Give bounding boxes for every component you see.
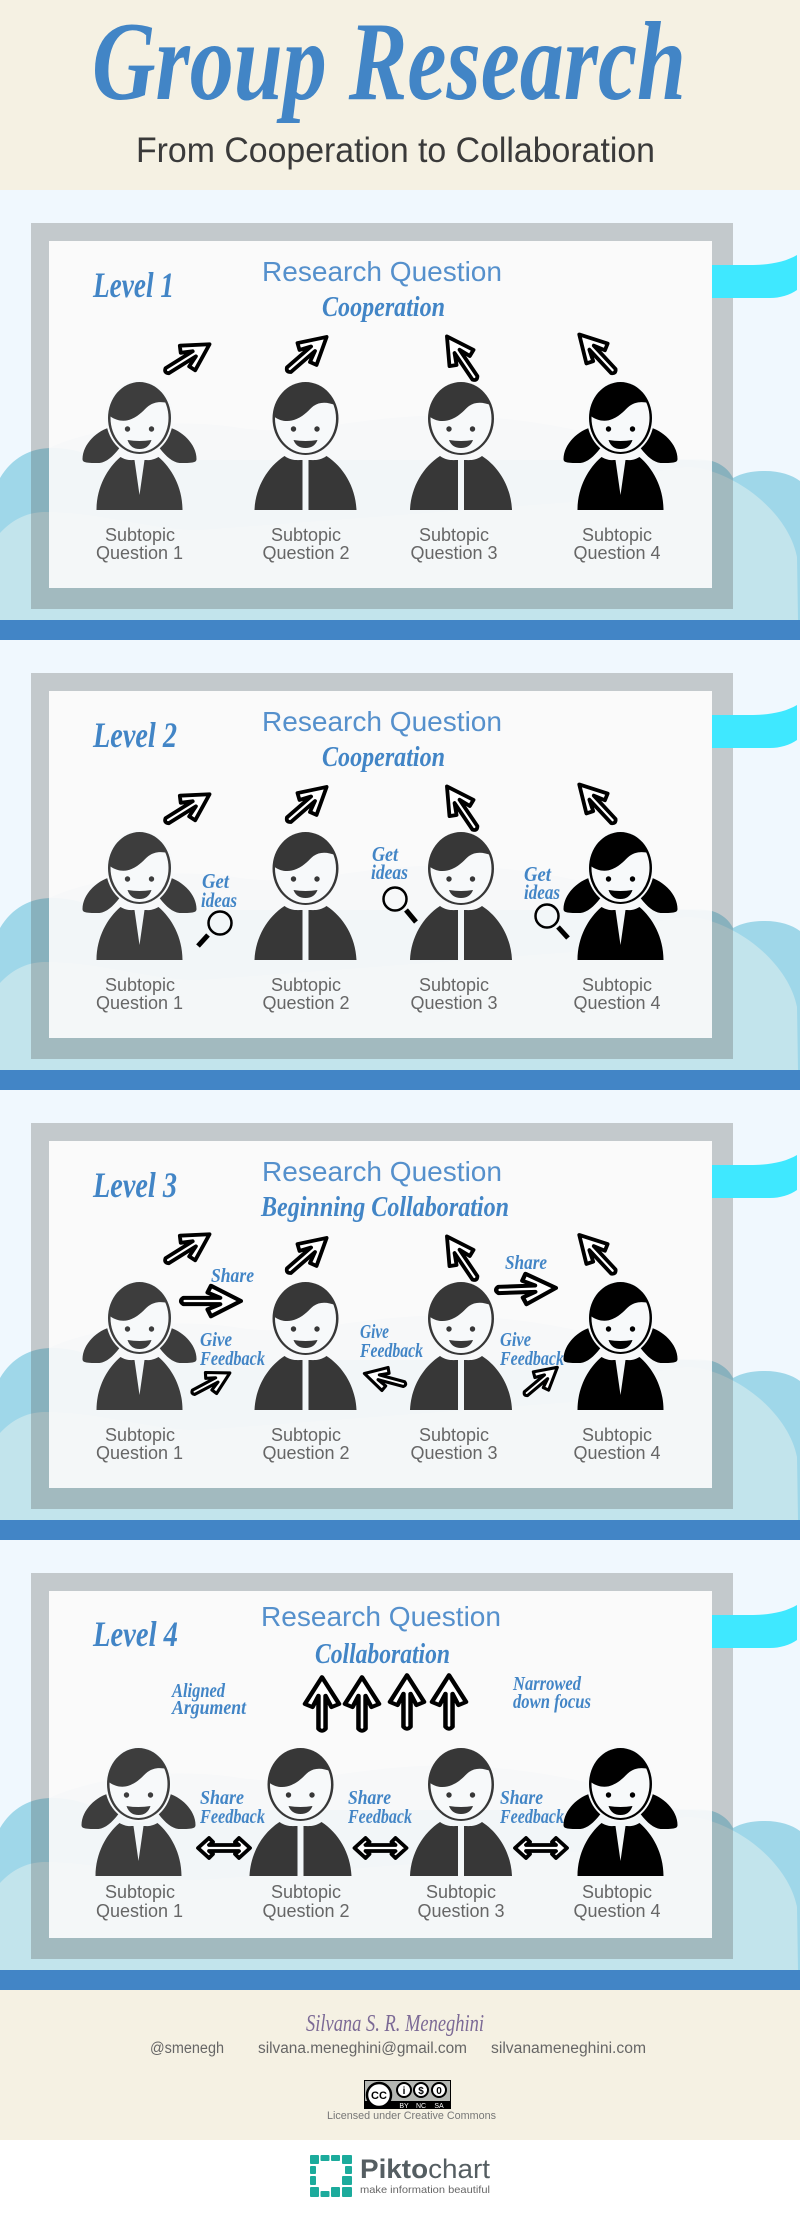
subtopic labels: Subtopic (271, 525, 341, 545)
subtopic labels: Subtopic (271, 1425, 341, 1445)
figure: student 3 (410, 1282, 512, 1410)
share feedback notes: Share (500, 1787, 543, 1809)
peer arrows (181, 1273, 565, 1404)
license text: Licensed under Creative Commons (327, 2110, 496, 2122)
figure: student 4 (564, 1746, 678, 1876)
figure: student 3 (410, 382, 512, 510)
subtopic labels: Subtopic (105, 975, 175, 995)
subtopic labels: Question 2 (262, 1901, 350, 1921)
get ideas notes: Get (202, 869, 230, 893)
creative commons badge: $ (418, 2086, 424, 2097)
get ideas notes: ideas (201, 888, 237, 912)
share and feedback notes: Feedback (499, 1348, 564, 1370)
share and feedback notes (199, 1252, 564, 1370)
subtopic labels: Question 4 (573, 1901, 661, 1921)
header band (0, 0, 800, 190)
research question heading: Research Question (262, 256, 502, 287)
share feedback notes: Feedback (199, 1806, 265, 1828)
subtopic labels: Question 4 (573, 993, 661, 1013)
research question heading: Research Question (261, 1601, 501, 1632)
subtopic labels: Question 1 (96, 543, 183, 563)
research question heading: Research Question (262, 706, 502, 737)
contact details (150, 2040, 646, 2057)
get ideas notes (201, 842, 560, 912)
subtopic labels: Subtopic (419, 1425, 489, 1445)
subtopic labels (96, 525, 661, 563)
subtopic labels: Question 4 (573, 1443, 661, 1463)
creative commons badge: BY (399, 2103, 409, 2110)
section: level 3 (0, 1123, 800, 1540)
subtopic labels: Question 3 (410, 543, 498, 563)
get ideas notes: Get (524, 862, 552, 886)
creative commons badge: NC (416, 2103, 426, 2110)
share and feedback notes: Share (505, 1252, 547, 1274)
subtopic labels: Subtopic (582, 975, 652, 995)
creative commons badge: i (403, 2086, 406, 2097)
subtopic labels: Subtopic (419, 525, 489, 545)
figure: student 1 (82, 1746, 196, 1876)
stage label: Cooperation (322, 742, 445, 773)
footer band (0, 1990, 800, 2140)
level heading: Level 2 (92, 715, 177, 755)
share feedback notes: Share (348, 1787, 391, 1809)
subtopic labels (96, 975, 661, 1013)
piktochart tagline: make information beautiful (360, 2184, 490, 2196)
share feedback notes: Feedback (499, 1806, 564, 1828)
side notes: Argument (170, 1697, 247, 1719)
subtopic labels: Subtopic (419, 975, 489, 995)
piktochart logo mark (310, 2155, 352, 2197)
contact details: silvanameneghini.com (491, 2040, 646, 2057)
get ideas notes: ideas (524, 880, 560, 904)
creative commons badge: SA (434, 2103, 444, 2110)
arrows to research question (158, 775, 625, 838)
share feedback notes: Share (200, 1787, 244, 1809)
subtopic labels: Subtopic (271, 975, 341, 995)
share and feedback notes: Share (211, 1265, 254, 1287)
research question heading: Research Question (262, 1156, 502, 1187)
upward arrows (305, 1675, 466, 1731)
share and feedback notes: Give (200, 1329, 232, 1351)
side notes: down focus (513, 1691, 591, 1713)
piktochart wordmark: Piktochart (360, 2154, 491, 2184)
subtopic labels: Question 2 (262, 1443, 350, 1463)
figure: student 4 (564, 830, 678, 960)
subtopic labels: Question 3 (410, 993, 498, 1013)
stage label: Collaboration (315, 1639, 450, 1670)
contact details: @smenegh (150, 2040, 224, 2057)
level heading: Level 1 (92, 265, 174, 305)
share and feedback notes: Give (500, 1329, 531, 1351)
subtitle: From Cooperation to Collaboration (136, 131, 655, 170)
subtopic labels: Subtopic (271, 1882, 341, 1902)
subtopic labels: Question 2 (262, 543, 350, 563)
subtopic labels: Subtopic (582, 525, 652, 545)
stage label: Beginning Collaboration (260, 1192, 509, 1223)
get ideas notes: Get (372, 842, 399, 866)
subtopic labels: Question 3 (410, 1443, 498, 1463)
figure: student 4 (564, 380, 678, 510)
figure: student 3 (410, 832, 512, 960)
get ideas notes: ideas (371, 860, 408, 884)
level heading: Level 3 (92, 1165, 177, 1205)
figure: student 3 (410, 1748, 512, 1876)
subtopic labels: Question 2 (262, 993, 350, 1013)
arrows to research question (158, 325, 625, 388)
subtopic labels: Question 4 (573, 543, 661, 563)
share feedback notes (199, 1787, 564, 1828)
subtopic labels: Question 1 (96, 1901, 183, 1921)
subtopic labels (96, 1425, 661, 1463)
contact details: silvana.meneghini@gmail.com (258, 2040, 467, 2057)
share feedback notes: Feedback (347, 1806, 412, 1828)
section: level 4 (0, 1573, 800, 1990)
figure: student 1 (82, 1280, 196, 1410)
share and feedback notes: Feedback (359, 1340, 423, 1362)
subtopic labels: Subtopic (426, 1882, 496, 1902)
figure: student 2 (254, 382, 356, 510)
side notes: Narrowed (512, 1673, 582, 1695)
section: level 1 (0, 223, 800, 640)
level heading: Level 4 (92, 1614, 178, 1654)
subtopic labels: Subtopic (105, 1882, 175, 1902)
author name: Silvana S. R. Meneghini (306, 2011, 484, 2037)
subtopic labels: Question 1 (96, 1443, 183, 1463)
subtopic labels (96, 1882, 661, 1921)
share and feedback notes: Feedback (199, 1348, 265, 1370)
subtopic labels: Question 1 (96, 993, 183, 1013)
subtopic labels: Subtopic (105, 1425, 175, 1445)
stage label: Cooperation (322, 292, 445, 323)
figure: student 2 (254, 1282, 356, 1410)
subtopic labels: Subtopic (105, 525, 175, 545)
arrows to research question (158, 1222, 625, 1288)
creative commons badge (364, 2080, 451, 2110)
subtopic labels: Question 3 (417, 1901, 505, 1921)
figure: student 2 (250, 1748, 352, 1876)
creative commons badge: 0 (436, 2086, 442, 2097)
figure: student 2 (254, 832, 356, 960)
two-way arrows (198, 1838, 567, 1858)
figure: student 4 (564, 1280, 678, 1410)
subtopic labels: Subtopic (582, 1425, 652, 1445)
side notes: Aligned (170, 1680, 226, 1702)
subtopic labels: Subtopic (582, 1882, 652, 1902)
share and feedback notes: Give (360, 1321, 389, 1343)
figure: student 1 (82, 380, 196, 510)
section: level 2 (0, 673, 800, 1090)
figure: student 1 (82, 830, 196, 960)
creative commons badge: CC (371, 2090, 387, 2102)
side notes (170, 1673, 591, 1719)
magnifier icons (198, 888, 568, 946)
